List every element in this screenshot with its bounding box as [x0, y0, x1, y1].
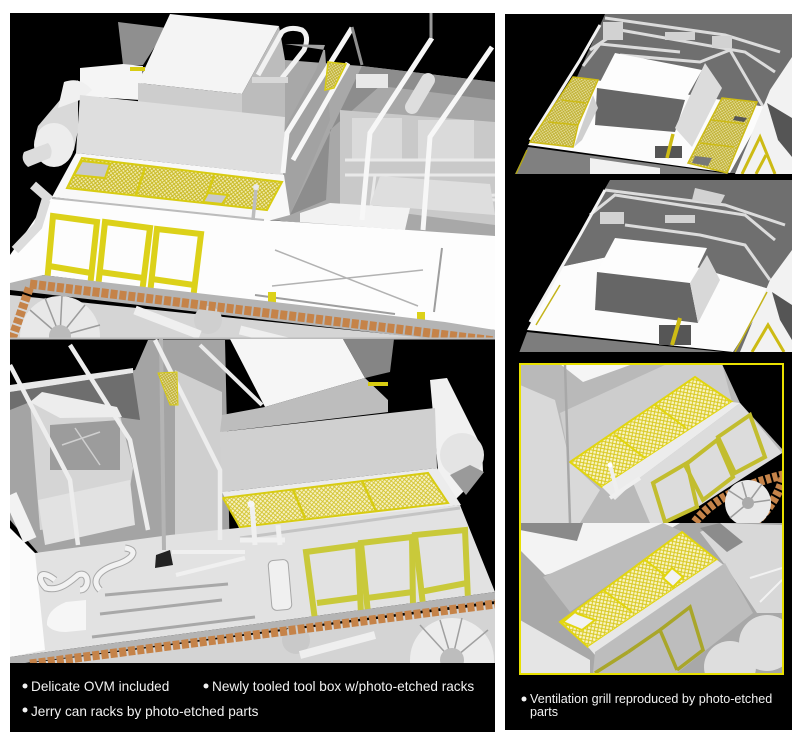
right white plate — [700, 523, 782, 613]
right grill — [688, 98, 757, 173]
tool box — [595, 238, 707, 323]
lower hull — [519, 332, 733, 353]
dark upper face — [520, 523, 583, 541]
S hook outline — [40, 548, 133, 590]
black background top right — [722, 364, 783, 450]
jerry can racks — [595, 607, 703, 673]
deck — [527, 250, 773, 352]
track around wheel — [755, 478, 783, 523]
tool box — [220, 339, 394, 432]
far-right plate — [740, 250, 792, 352]
open lid — [675, 63, 722, 147]
panel: lower-left render with OVM tools — [10, 339, 495, 663]
left grill — [530, 77, 598, 147]
side plate — [593, 563, 753, 673]
white struts — [750, 568, 782, 602]
yellow outline — [520, 364, 783, 674]
stowage rod — [255, 248, 442, 314]
interior dark — [560, 180, 792, 352]
lower close-up — [520, 523, 795, 693]
grill — [570, 377, 732, 487]
left suspension bracket — [15, 185, 50, 250]
machinery — [603, 22, 732, 48]
hull side plate — [10, 197, 495, 330]
lever knob — [253, 184, 259, 190]
deck white — [52, 153, 290, 222]
yellow rack on far wall — [158, 372, 178, 405]
interior dark — [577, 14, 792, 174]
upper close-up — [520, 364, 783, 526]
muffler — [22, 80, 80, 167]
antenna base — [155, 550, 173, 568]
small stowage box — [655, 146, 682, 158]
X bracing on plate — [272, 250, 423, 306]
panel: top view with PE racks — [515, 14, 792, 174]
lid — [560, 364, 732, 462]
yellow strap — [667, 134, 673, 158]
white top — [520, 523, 680, 575]
panel: top view without PE racks — [519, 180, 792, 353]
tool shafts — [92, 584, 255, 637]
bullet 1 — [22, 684, 28, 688]
text: tool box: Newly tooled tool box w/photo-etched racks — [212, 679, 474, 694]
bullet — [522, 696, 526, 702]
white shoulder behind muffler — [80, 64, 143, 100]
panel: outlined close-up views — [520, 364, 795, 693]
interior of fighting compartment — [270, 60, 495, 240]
side rail — [530, 190, 605, 322]
grey flap — [118, 22, 167, 65]
text: jerry can: Jerry can racks by photo-etched parts — [31, 704, 259, 719]
left white region — [520, 620, 590, 674]
wheel — [725, 480, 771, 526]
underside strip — [10, 275, 495, 339]
fighting compartment interior — [10, 340, 230, 560]
caption: left features — [22, 679, 474, 719]
road wheels — [704, 615, 795, 693]
suspension — [30, 604, 495, 702]
tow bars — [172, 552, 245, 575]
bullet 3 — [22, 708, 28, 712]
lever handle — [240, 505, 285, 545]
antenna pole — [161, 339, 164, 550]
side stowage rack — [286, 44, 326, 64]
wheel hub — [742, 497, 754, 509]
S hooks — [40, 548, 133, 590]
stowed cylinder — [412, 80, 428, 107]
upper hollow — [700, 523, 743, 552]
jerry can racks — [47, 216, 201, 299]
ventilation grill — [67, 158, 282, 210]
white foreground left — [10, 528, 45, 657]
deck strip — [588, 560, 725, 655]
small stowage box — [659, 325, 691, 345]
small rack yellow — [325, 62, 346, 90]
caption: ventilation grill — [522, 692, 772, 719]
muffler — [430, 378, 484, 505]
grill — [223, 473, 448, 527]
tool box — [138, 14, 285, 117]
left wall and side plates — [175, 370, 222, 534]
open lid — [690, 255, 720, 323]
far rails — [583, 18, 780, 110]
text: Ventilation grill reproduced by photo-etched — [530, 692, 772, 706]
black gap under plate — [667, 453, 783, 523]
lever knob — [608, 462, 612, 468]
far rails — [590, 190, 785, 280]
long rail — [240, 508, 460, 538]
deck rail — [52, 198, 264, 220]
panel: left column background — [10, 13, 495, 732]
panel: right column background — [505, 14, 792, 730]
side plate — [10, 505, 495, 657]
yellow strap — [672, 318, 680, 345]
lever knob — [248, 500, 254, 508]
rear support strut — [352, 27, 362, 65]
yellow tab on tool box — [368, 382, 388, 386]
lever — [253, 188, 256, 220]
handle loop — [258, 28, 307, 78]
deck — [222, 468, 461, 530]
racks beside tool box — [200, 345, 262, 405]
grill — [560, 532, 717, 647]
jerry can racks — [306, 530, 468, 620]
fire extinguisher — [268, 559, 292, 611]
panel: top-left render of hull with tool box — [10, 13, 495, 338]
dark vent — [772, 292, 792, 340]
roll bars — [283, 28, 492, 230]
dark vent on plate — [767, 103, 792, 157]
deck strip — [602, 402, 740, 500]
antenna — [565, 365, 570, 523]
background grey structure — [520, 364, 783, 524]
text: OVM: Delicate OVM included — [31, 679, 169, 694]
white top of box — [560, 364, 633, 382]
roll bars and side rails — [10, 340, 220, 545]
yellow rack frames — [752, 325, 784, 352]
searchlight — [47, 600, 86, 632]
text continued: parts — [530, 705, 558, 719]
far-right plate — [735, 57, 792, 174]
track — [12, 284, 495, 341]
yellow edge lines — [536, 285, 767, 352]
yellow tab on flap — [130, 67, 145, 71]
lower hull — [515, 147, 730, 174]
wheel spokes — [728, 482, 770, 518]
background — [520, 523, 783, 674]
yellow clasps — [272, 292, 421, 323]
track — [695, 475, 783, 522]
white body left — [520, 385, 600, 523]
aerial — [430, 13, 432, 38]
underside strip — [10, 592, 495, 665]
lid — [543, 523, 683, 612]
near flap — [574, 95, 598, 147]
side plate — [633, 403, 782, 523]
jerry can racks — [653, 415, 765, 522]
lever — [610, 465, 640, 498]
side rail — [530, 25, 600, 140]
yellow rack frames — [742, 137, 775, 174]
suspension — [10, 295, 421, 338]
hinged lid — [220, 408, 437, 492]
tool box — [595, 53, 702, 132]
track — [30, 604, 495, 664]
deck — [528, 77, 767, 173]
machinery — [600, 188, 725, 224]
bullet 2 — [204, 684, 208, 688]
hinged lid panel — [76, 95, 285, 175]
white fender pieces — [590, 158, 660, 174]
panel border line — [10, 338, 495, 340]
yellow edge — [516, 150, 527, 174]
